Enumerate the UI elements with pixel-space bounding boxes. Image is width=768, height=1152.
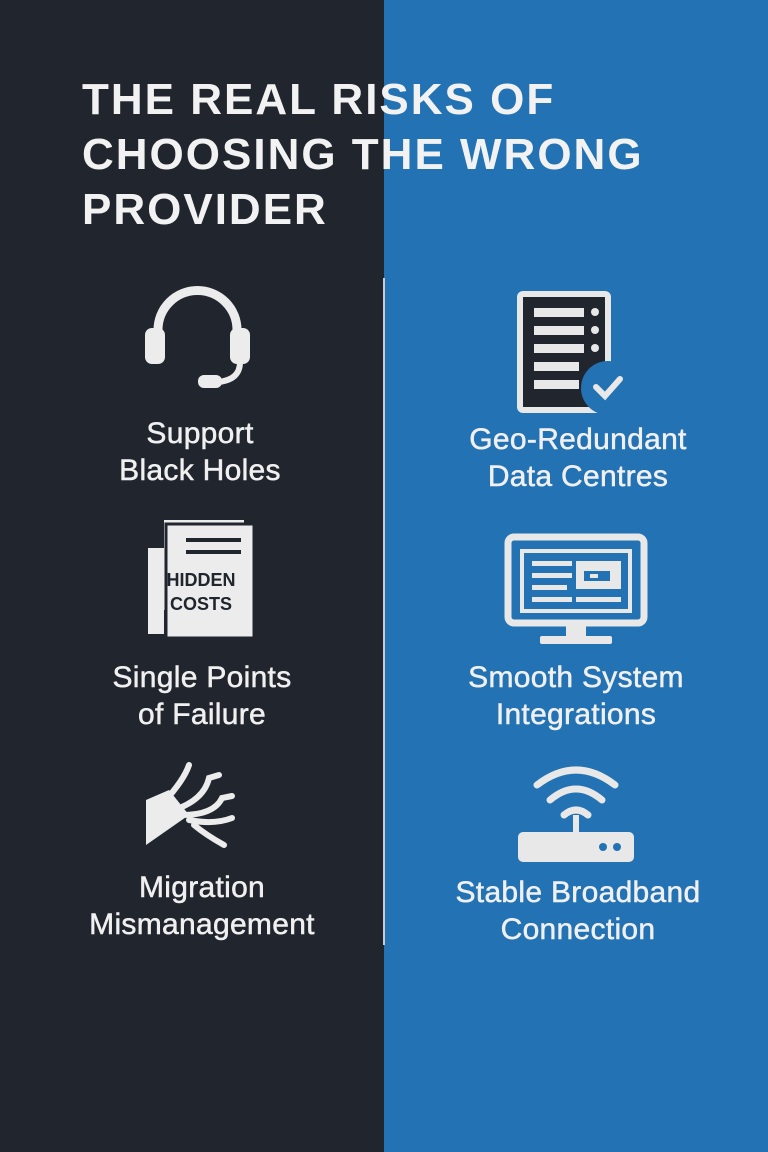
label: Smooth System Integrations: Integrations [496,698,656,731]
label: Single Points of Failure: of Failure [138,698,266,731]
title: PROVIDER [82,185,328,234]
label: Migration Mismanagement [89,871,315,941]
label: Single Points of Failure [112,661,292,731]
label: Geo-Redundant Data Centres: Geo-Redundant [469,423,687,456]
label: Stable Broadband Connection [456,876,700,946]
label: Support Black Holes: Support [146,417,254,450]
title [82,75,644,234]
label: Geo-Redundant Data Centres: Data Centres [488,460,668,493]
icon: broken cable [146,762,235,848]
label: Stable Broadband Connection: Connection [501,913,655,946]
label: Smooth System Integrations [468,661,684,731]
title: CHOOSING THE WRONG [82,130,644,179]
label: Smooth System Integrations: Smooth System [468,661,684,694]
icon: wifi router [518,766,634,862]
icon: hidden costs document: HIDDEN [166,570,236,590]
label: Stable Broadband Connection: Stable Broadband [456,876,700,909]
label: Single Points of Failure: Single Points [112,661,292,694]
label: Migration Mismanagement: Migration [139,871,265,904]
label: Migration Mismanagement: Mismanagement [89,908,315,941]
icon: headset [145,286,250,388]
label: Support Black Holes: Black Holes [119,454,281,487]
divider line [383,278,385,945]
icon: hidden costs document [148,520,252,636]
label: Support Black Holes [119,417,281,487]
icon: hidden costs document: COSTS [170,594,232,614]
icon: monitor [504,534,648,644]
label: Geo-Redundant Data Centres [469,423,687,493]
icon: server with check [517,291,623,413]
title: THE REAL RISKS OF [82,75,555,124]
